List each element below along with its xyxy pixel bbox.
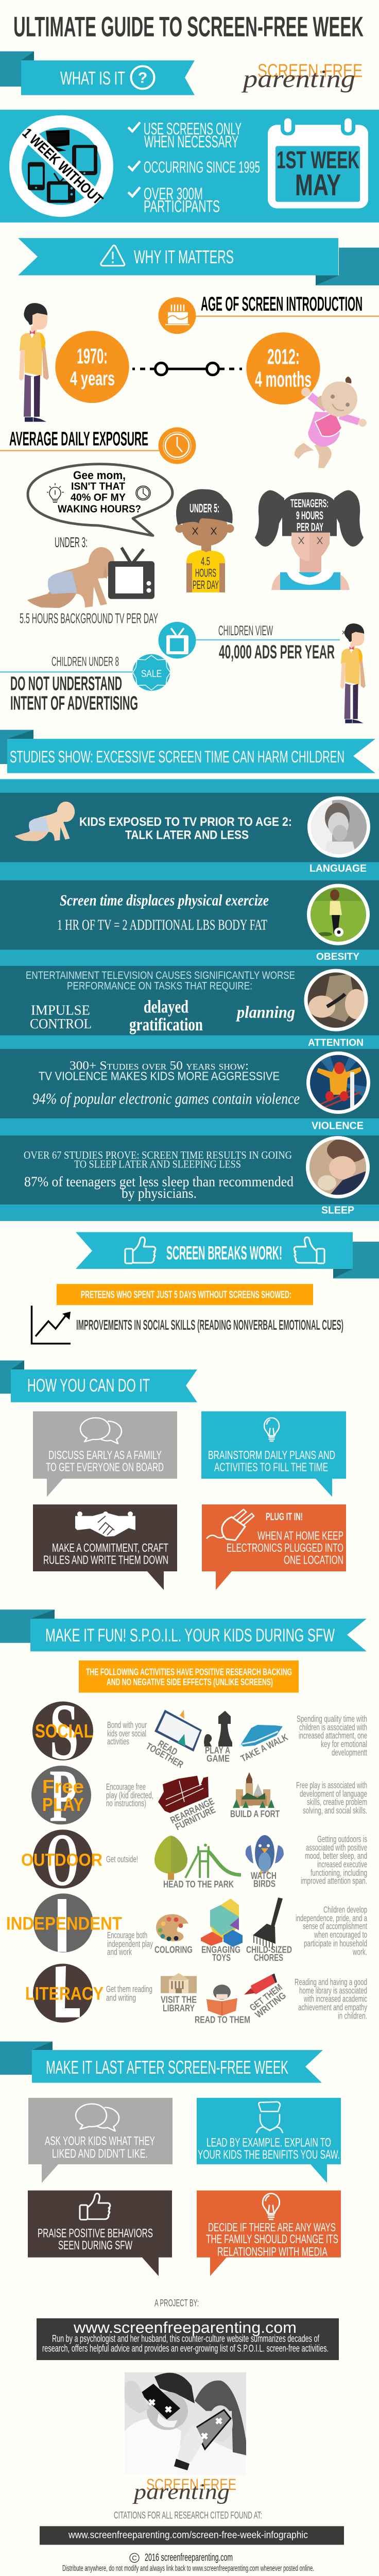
icon: sale badge — [133, 654, 170, 691]
stat: 1970 four years: 1970: — [77, 345, 108, 368]
speech box: lead by example — [197, 2098, 341, 2183]
panel: violence — [32, 1053, 369, 1131]
figure: teenager: 9 HOURS — [296, 509, 323, 522]
row: literacy: Get them reading — [106, 1984, 152, 1994]
panel: language: KIDS EXPOSED TO TV PRIOR TO AGE 2: — [79, 815, 292, 829]
callout: preteens — [57, 1284, 313, 1305]
checklist — [128, 119, 260, 215]
panel: attention: planning — [235, 1003, 295, 1022]
figure: teenager: TEENAGERS: — [290, 497, 329, 510]
speech bubble — [28, 464, 173, 535]
speech box: make a commitment: RULES AND WRITE THEM DOWN — [43, 1554, 168, 1567]
panel: attention — [26, 969, 368, 1048]
speech box: make a commitment: MAKE A COMMITMENT, CRAFT — [52, 1541, 168, 1555]
calendar: 1st week May — [268, 118, 368, 208]
row: outdoor: Get outside! — [106, 1854, 138, 1865]
row: outdoor: BIRDS — [253, 1878, 275, 1889]
figure: child under 5: PER DAY — [193, 579, 219, 592]
row: social: S — [49, 1687, 79, 1776]
heading banner: why it matters — [18, 238, 379, 285]
row: social: kids over social — [107, 1728, 146, 1738]
callout: positive research backing: AND NO NEGATIVE SIDE EFFECTS (UNLIKE SCREENS) — [107, 1676, 273, 1687]
row: independent: TOYS — [212, 1952, 231, 1963]
logo: screen-free parenting, footer: parenting — [132, 2480, 230, 2504]
stat: children under 8: INTENT OF ADVERTISING — [10, 692, 138, 714]
panel: harms background — [0, 779, 379, 1221]
row: independent: CHILD-SIZED — [246, 1944, 292, 1955]
icon: tv ads — [159, 622, 196, 658]
icon: rising line chart — [32, 1306, 71, 1344]
row: social: SOCIAL — [35, 1720, 93, 1741]
panel: violence: TV VIOLENCE MAKES KIDS MORE AGGRESSIVE — [39, 1070, 280, 1083]
row: free play: no instructions) — [106, 1798, 146, 1808]
row: outdoor — [21, 1818, 367, 1902]
stat: 40,000 ads per year: CHILDREN VIEW — [218, 623, 273, 638]
row: literacy: VISIT THE — [161, 1994, 197, 2005]
citations heading: CITATIONS FOR ALL RESEARCH CITED FOUND AT: — [114, 2510, 262, 2521]
row: independent: and work — [107, 1947, 132, 1957]
stat: 40,000 ads per year — [196, 623, 340, 663]
speech box: plug it in: ONE LOCATION — [284, 1554, 343, 1567]
panel: sleep: TO SLEEP LATER AND SLEEPING LESS — [74, 1158, 241, 1170]
panel: obesity: 1 HR OF TV = 2 ADDITIONAL LBS BODY FAT — [57, 917, 267, 933]
row: free play: P — [49, 1754, 77, 1838]
row: social: activities — [107, 1736, 129, 1747]
row: outdoor: WATCH — [251, 1870, 277, 1881]
speech box: ask your kids: ASK YOUR KIDS WHAT THEY — [45, 2134, 155, 2148]
citations url bar — [40, 2526, 344, 2545]
logo: screen-free parenting, footer: SCREEN·FREE — [146, 2475, 236, 2494]
calendar: 1st week May: MAY — [295, 168, 341, 202]
row: literacy: LIBRARY — [163, 2003, 195, 2013]
panel: sleep: 87% of teenagers get less sleep than recommended — [24, 1174, 294, 1190]
row: social: TOGETHER — [144, 1740, 185, 1770]
timeline connector — [132, 363, 242, 375]
figure: teenager: PER DAY — [297, 520, 323, 534]
heading banner: how you can do it: HOW YOU CAN DO IT — [27, 1376, 150, 1396]
speech bubble: WAKING HOURS? — [58, 503, 141, 515]
row: free play: PLAY — [42, 1794, 84, 1815]
speech box: discuss early: DISCUSS EARLY AS A FAMILY — [48, 1449, 162, 1462]
row: social: Bond with your — [107, 1720, 147, 1730]
heading banner: studies show — [0, 730, 375, 773]
row: social — [32, 1687, 367, 1776]
panel: obesity: OBESITY — [316, 951, 359, 962]
heading banner: make it fun — [0, 1609, 367, 1651]
row: literacy: LITERACY — [25, 1984, 104, 2004]
panel: sleep — [24, 1138, 368, 1216]
icon: one week without screens: 1 WEEK WITHOUT — [19, 125, 106, 208]
row: free play: Encourage free — [106, 1782, 146, 1792]
row: independent: ENGAGING — [201, 1944, 240, 1955]
speech box: praise positive behaviors — [28, 2191, 172, 2276]
row: social: READ — [156, 1738, 179, 1757]
speech box: ask your kids: LIKED AND DIDN'T LIKE. — [52, 2147, 148, 2161]
panel: sleep: by physicians. — [122, 1185, 197, 1201]
panel: sleep: SLEEP — [321, 1205, 354, 1216]
row: independent: INDEPENDENT — [6, 1913, 122, 1934]
panel: sleep: OVER 67 STUDIES PROVE: SCREEN TIME RESULTS IN GOING — [24, 1149, 292, 1161]
panel: language: LANGUAGE — [309, 862, 367, 874]
stat: 2012 four months: 2012: — [267, 345, 300, 369]
speech box: praise positive behaviors: PRAISE POSITIVE BEHAVIORS — [38, 2227, 153, 2240]
copyright — [130, 2552, 233, 2564]
figure: child under 5 — [175, 489, 234, 592]
stat: 2012 four months: 4 months — [255, 368, 312, 392]
photo: founders with phones over eyes — [125, 2372, 246, 2476]
row: social: GAME — [206, 1753, 230, 1764]
panel: attention: CONTROL — [30, 1015, 92, 1031]
figure: child under 5: 4.5 — [201, 554, 210, 568]
speech box: plug it in — [202, 1504, 346, 1590]
stat: children under 8: DO NOT UNDERSTAND — [10, 673, 122, 694]
panel: language: TALK LATER AND LESS — [125, 828, 249, 842]
copyright: C — [132, 2554, 137, 2562]
figure: teenager — [255, 490, 364, 590]
heading banner: screen breaks work — [76, 1232, 379, 1278]
figure: man — [19, 303, 49, 422]
row: literacy — [25, 1964, 367, 2025]
text: UNDER 3: — [55, 534, 88, 550]
speech box: discuss early — [33, 1411, 177, 1497]
speech bubble: Gee mom, — [73, 468, 126, 482]
row: free play: FURNITURE — [174, 1804, 217, 1832]
row: outdoor: OUTDOOR — [21, 1851, 102, 1870]
row: free play: play (kid directed, — [106, 1790, 153, 1801]
checklist: OVER 300M — [144, 184, 203, 203]
heading banner: make it last — [0, 2041, 323, 2083]
panel: violence: 94% of popular electronic games contain violence — [32, 1090, 300, 1107]
checklist: PARTICIPANTS — [144, 197, 220, 215]
row: social: TAKE A WALK — [239, 1732, 290, 1764]
speech box: plug it in: PLUG IT IN! — [266, 1511, 303, 1522]
icon: clock — [159, 427, 196, 464]
panel: website description: www.screenfreeparenting.com — [73, 2319, 297, 2336]
stat: 1970 four years: 4 years — [70, 368, 115, 389]
panel: language — [15, 798, 369, 874]
row: independent: independent play — [107, 1939, 153, 1949]
row: free play — [31, 1754, 367, 1838]
panel: attention: ENTERTAINMENT TELEVISION CAUSES SIGNIFICANTLY WORSE — [26, 969, 295, 981]
figure: child under 5: UNDER 5: — [190, 502, 219, 515]
row: literacy: WRITING — [253, 1990, 288, 2020]
panel: attention: gratification — [129, 1014, 203, 1035]
figure: child under 5: HOURS — [195, 566, 216, 580]
speech box: make a commitment — [33, 1504, 177, 1590]
panel: attention: delayed — [144, 996, 188, 1017]
row: independent: CHORES — [254, 1952, 283, 1963]
heading banner: what is it — [0, 52, 195, 95]
row: social: PLAY A — [205, 1745, 230, 1756]
heading banner: how you can do it — [0, 1361, 197, 1402]
icon: television — [108, 548, 154, 599]
row: independent — [6, 1893, 367, 1963]
row: outdoor: O — [46, 1818, 79, 1902]
callout: positive research backing — [79, 1660, 299, 1692]
speech box: praise positive behaviors: SEEN DURING SFW — [58, 2239, 132, 2252]
panel: attention: IMPULSE — [31, 1002, 90, 1018]
speech bubble: ISN'T THAT — [71, 481, 125, 493]
panel: attention: PERFORMANCE ON TASKS THAT REQUIRE: — [67, 979, 252, 992]
row: free play: BUILD A FORT — [230, 1808, 280, 1819]
checklist: USE SCREENS ONLY — [144, 119, 242, 138]
heading banner: why it matters: WHY IT MATTERS — [134, 246, 234, 267]
label: a project by: A PROJECT BY: — [154, 2298, 199, 2309]
speech box: brainstorm — [201, 1411, 346, 1497]
panel: what is it — [0, 110, 379, 223]
icon: sale badge: SALE — [141, 668, 162, 680]
figure: crawling baby — [27, 547, 114, 608]
row: literacy: and writing — [106, 1993, 136, 2003]
heading banner: what is it: WHAT IS IT — [60, 68, 125, 89]
row: independent: work. — [352, 1947, 367, 1957]
heading banner: what is it: ? — [138, 70, 147, 87]
checklist: OCCURRING SINCE 1995 — [144, 158, 260, 176]
figure: boy with crossed-out eyes — [340, 623, 366, 723]
stat: children under 8 — [0, 655, 138, 714]
row: independent: Encourage both — [107, 1930, 147, 1940]
stat: 1970 four years — [55, 331, 129, 403]
panel: website description — [37, 2318, 339, 2360]
row: independent: COLORING — [154, 1944, 193, 1955]
icon: birthday cake — [159, 297, 196, 334]
logo: screen-free parenting: parenting — [242, 65, 355, 93]
speech box: discuss early: TO GET EVERYONE ON BOARD — [46, 1461, 164, 1475]
stat: children under 8: CHILDREN UNDER 8 — [51, 655, 119, 669]
panel: obesity — [57, 886, 369, 962]
row: literacy: READ TO THEM — [195, 2014, 250, 2025]
panel: attention: ATTENTION — [308, 1037, 364, 1048]
panel: violence: 300+ Studies over 50 years show: — [70, 1059, 249, 1073]
row: outdoor: HEAD TO THE PARK — [163, 1879, 234, 1889]
checklist: WHEN NECESSARY — [144, 132, 238, 151]
panel: violence: VIOLENCE — [312, 1120, 364, 1131]
row: free play: Free — [42, 1776, 84, 1797]
speech bubble: 40% OF MY — [71, 492, 126, 503]
heading: average daily exposure: AVERAGE DAILY EXPOSURE — [9, 428, 148, 450]
speech box: decide if there are any ways — [197, 2191, 341, 2276]
stat: 2012 four months — [246, 332, 320, 404]
panel: obesity: Screen time displaces physical exercize — [60, 892, 269, 909]
copyright: 2016 screenfreeparenting.com — [145, 2552, 233, 2564]
citations url bar: www.screenfreeparenting.com/screen-free-week-infographic — [68, 2530, 308, 2541]
speech box: ask your kids — [28, 2098, 173, 2183]
row: literacy: GET THEM — [248, 1981, 284, 2013]
caption: under 3 exposure: 5.5 HOURS BACKGROUND TV PER DAY — [20, 611, 158, 626]
row: free play: REARRANGE — [168, 1795, 216, 1825]
figure: baby reaching — [295, 377, 367, 468]
